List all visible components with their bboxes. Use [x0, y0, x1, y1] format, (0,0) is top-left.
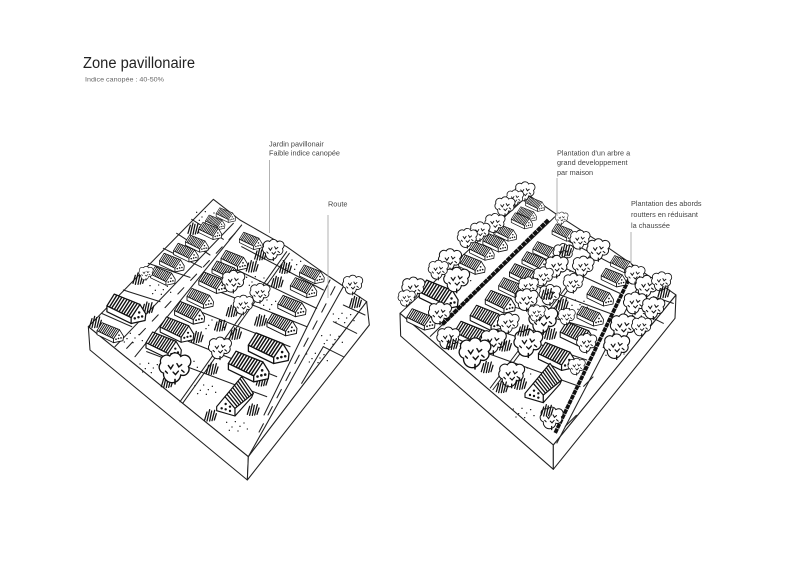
grass tufts [90, 223, 361, 421]
annotation: roadside planting label [631, 199, 702, 263]
grass tufts [446, 245, 670, 416]
annotation: garden label: Jardin pavillonair [269, 140, 324, 148]
annotation: road label [328, 200, 347, 298]
roads with dense hedges [430, 217, 643, 443]
annotation: tree planting label [557, 148, 631, 216]
plot dividers [102, 219, 365, 397]
block base [88, 199, 369, 480]
annotation: garden label [269, 140, 340, 233]
dots [121, 211, 355, 432]
houses [407, 197, 633, 403]
annotation: road label: Route [328, 200, 347, 208]
houses [97, 208, 324, 416]
plot dividers [460, 237, 673, 387]
trees [139, 239, 363, 385]
annotation: tree planting label: grand developpement [557, 158, 628, 167]
dots [449, 266, 651, 418]
annotation: roadside planting label: la chaussée [631, 221, 670, 230]
annotation: garden label: Faible indice canopée [269, 148, 340, 158]
annotation: roadside planting label: Plantation des abords [631, 199, 702, 208]
subtitle: canopy index: Indice canopée : 40-50% [85, 76, 164, 84]
trees [398, 182, 672, 430]
annotation: roadside planting label: routters en réduisant [631, 210, 698, 219]
panel: planted state block diagram [398, 182, 676, 469]
title: Zone pavillonaire [83, 55, 195, 72]
roads [115, 223, 343, 457]
block base [400, 195, 676, 469]
annotation: tree planting label: par maison [557, 168, 593, 177]
panel: current state block diagram [88, 199, 369, 480]
annotation: tree planting label: Plantation d'un arbre a [557, 148, 631, 158]
